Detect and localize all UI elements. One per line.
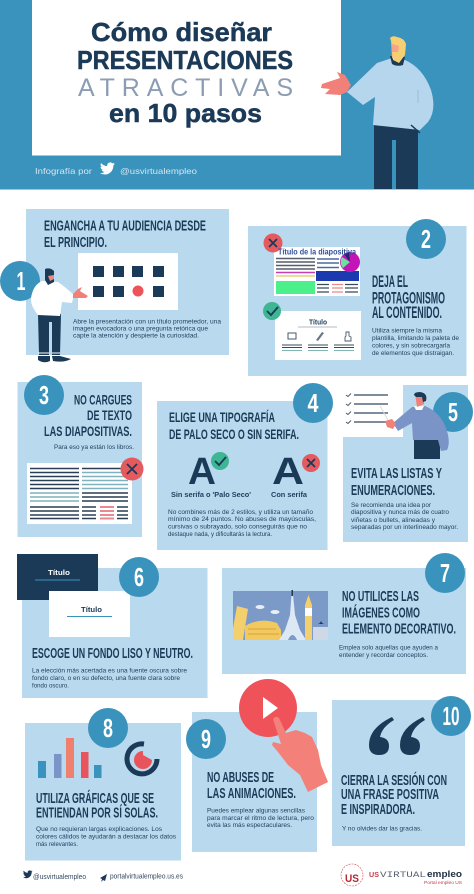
heading: [372, 272, 445, 322]
author credit: [35, 162, 197, 176]
number 7: 7: [440, 558, 450, 588]
description: entender y recordar conceptos.: [339, 652, 428, 659]
heading: LAS ANIMACIONES.: [207, 785, 296, 802]
caption: Para eso ya están los libros.: [54, 444, 134, 451]
description: Puedes emplear algunas sencillas: [207, 808, 306, 814]
number 10: [431, 696, 471, 736]
icon: cross: [120, 458, 144, 480]
description: [207, 808, 314, 829]
logo: US virtual empleo: empleo: [427, 869, 462, 880]
bar chart: [38, 738, 102, 778]
description: evita las más espectaculares.: [207, 822, 292, 829]
bad slide example: [274, 247, 360, 296]
number 4: 4: [308, 388, 319, 418]
description: Y no olvides dar las gracias.: [342, 826, 422, 832]
description: fondo oscuro.: [32, 682, 69, 690]
number 9: [186, 719, 226, 759]
number 9: 9: [201, 724, 211, 754]
panel: step 2: [248, 219, 466, 376]
number 4: [293, 383, 333, 423]
sans serif example: Sin serifa o 'Palo Seco': [171, 490, 251, 499]
heading: [44, 392, 132, 439]
description: Emplea solo aquellas que ayuden a: [339, 644, 438, 652]
panel: step 6: [17, 554, 208, 698]
sans serif example: [171, 451, 251, 499]
number 10: 10: [442, 701, 460, 731]
description: La elección más acertada es una fuente oscura sobre: [32, 668, 187, 674]
title: Cómo diseñar: [91, 17, 272, 47]
dark slide: Título: [48, 568, 70, 577]
heading: [342, 588, 456, 638]
heading: ENGANCHA A TU AUDIENCIA DESDE: [44, 218, 206, 234]
number 5: [433, 392, 473, 432]
presenter figure: [321, 36, 433, 189]
panel: step 7: [222, 553, 466, 674]
title: en 10 pasos: [109, 98, 262, 128]
number 1: 1: [16, 266, 26, 296]
title panel: [32, 0, 341, 156]
number 3: 3: [39, 380, 49, 410]
heading: EL PRINCIPIO.: [44, 235, 107, 251]
serif example: A: [272, 451, 304, 493]
author credit: Infografía por: [35, 166, 92, 176]
good slide example: Título: [309, 318, 327, 326]
number 8: [88, 708, 128, 748]
panel: step 9: [186, 679, 328, 852]
description: [73, 318, 221, 340]
description: Que no requieran largas explicaciones. Los: [36, 826, 163, 833]
heading: DE PALO SECO O SIN SERIFA.: [169, 426, 299, 442]
heading: NO ABUSES DE: [207, 769, 274, 786]
description: [168, 509, 316, 538]
description: plantilla, limitando la paleta de: [372, 335, 459, 342]
description: para marcar el ritmo de lectura, pero: [207, 815, 314, 822]
description: colores cálidos te ayudarán a destacar los datos: [36, 834, 177, 840]
panel: step 10: [332, 696, 471, 846]
description: más relevantes.: [36, 841, 78, 848]
heading: [351, 466, 442, 499]
title: [77, 17, 293, 128]
heading: DE TEXTO: [87, 407, 132, 423]
number 7: [425, 553, 465, 593]
logo: US virtual empleo: VIRTUAL: [380, 870, 426, 880]
icon: check: [263, 302, 281, 320]
footer links: @usvirtualempleo: [33, 874, 86, 881]
logo: US virtual empleo: Portal empleo US: [424, 880, 462, 885]
icon: cross: [264, 234, 282, 252]
icon: twitter bird: [23, 870, 33, 878]
description: Abre la presentación con un título prometedor, una: [73, 318, 221, 326]
description: diapositiva y nunca más de cuatro: [351, 509, 449, 516]
title: ATRACTIVAS: [78, 74, 293, 102]
description: capte la atención y despierte la curiosidad.: [73, 332, 199, 340]
footer links: portalvirtualempleo.us.es: [110, 874, 183, 880]
heading: [169, 409, 299, 442]
description: cursivas o subrayado, solo conseguirás que no: [168, 524, 307, 530]
description: [339, 644, 438, 659]
heading: E INSPIRADORA.: [341, 802, 415, 818]
title: PRESENTACIONES: [77, 45, 293, 75]
heading: LAS DIAPOSITIVAS.: [44, 423, 132, 439]
header banner: [0, 0, 474, 190]
description: Se recomienda una idea por: [351, 502, 432, 509]
description: [372, 328, 459, 357]
number 1: [0, 261, 40, 301]
heading: ESCOGE UN FONDO LISO Y NEUTRO.: [32, 646, 193, 662]
heading: UTILIZA GRÁFICAS QUE SE: [36, 790, 154, 807]
description: No combines más de 2 estilos, y utiliza un tamaño: [168, 509, 313, 516]
number 5: 5: [448, 397, 458, 427]
description: imagen evocadora o una pregunta retórica que: [73, 326, 208, 332]
icon: quotation marks: [369, 717, 425, 755]
city landmarks image: [233, 590, 328, 640]
description: [32, 668, 187, 690]
light slide: [49, 591, 130, 637]
description: [351, 502, 458, 531]
description: destaque nada, y dificultarás la lectura.: [168, 531, 272, 538]
description: separadas por un interlineado mayor.: [351, 524, 458, 531]
number 6: 6: [134, 562, 144, 592]
logo: US virtual empleo: US: [345, 873, 359, 885]
panel: step 1: [0, 209, 229, 362]
icon: twitter bird: [100, 162, 115, 174]
heading: [36, 790, 158, 822]
play button: [239, 679, 297, 737]
heading: [207, 769, 296, 802]
panel: step 3: [18, 375, 144, 537]
heading: DEJA EL: [372, 272, 408, 291]
icon: paper plane: [100, 874, 107, 882]
description: Utiliza siempre la misma: [372, 328, 442, 334]
heading: ENTIENDAN POR SÍ SOLAS.: [36, 804, 158, 822]
light slide: Título: [81, 605, 102, 614]
logo: US virtual empleo: US: [369, 872, 379, 879]
heading: IMÁGENES COMO: [342, 604, 420, 622]
number 6: [119, 557, 159, 597]
heading: NO CARGUES: [74, 392, 132, 408]
sans serif example: A: [188, 451, 216, 493]
serif example: Con serifa: [271, 490, 308, 499]
heading: [341, 771, 447, 818]
description: [36, 826, 177, 848]
description: viñetas o bullets, alineadas y: [351, 517, 436, 524]
number 2: [406, 219, 446, 259]
panel: step 4: [157, 383, 333, 550]
heading: NO UTILICES LAS: [342, 588, 419, 605]
logo: US virtual empleo: [341, 864, 462, 886]
good slide example: [275, 311, 361, 360]
panel: step 5: [343, 385, 473, 542]
text-heavy slide: [27, 463, 132, 524]
footer links: [23, 870, 183, 882]
donut chart: [127, 744, 157, 774]
description: fondo claro, o en su defecto, una fuente clara sobre: [32, 675, 180, 682]
presenter figure: [31, 268, 88, 362]
slide with squares: [78, 253, 178, 310]
icon: pointing hand: [272, 717, 328, 792]
slide title overflowing: Título de la diapositiva: [278, 246, 356, 256]
dark slide: [17, 554, 98, 600]
presenter figure: [380, 392, 449, 459]
description: colores, y sin sobrecargarla: [372, 342, 450, 350]
checklist: [346, 394, 388, 424]
number 8: 8: [103, 713, 113, 743]
number 2: 2: [421, 224, 431, 254]
author credit: @usvirtualempleo: [120, 166, 197, 176]
description: mínimo de 24 puntos. No abuses de mayúsculas,: [168, 516, 316, 523]
description: de elementos que distraigan.: [372, 350, 454, 357]
heading: ELIGE UNA TIPOGRAFÍA: [169, 409, 275, 425]
number 3: [24, 375, 64, 415]
panel: step 8: [25, 708, 181, 860]
serif example: [271, 451, 320, 499]
heading: [44, 218, 206, 251]
